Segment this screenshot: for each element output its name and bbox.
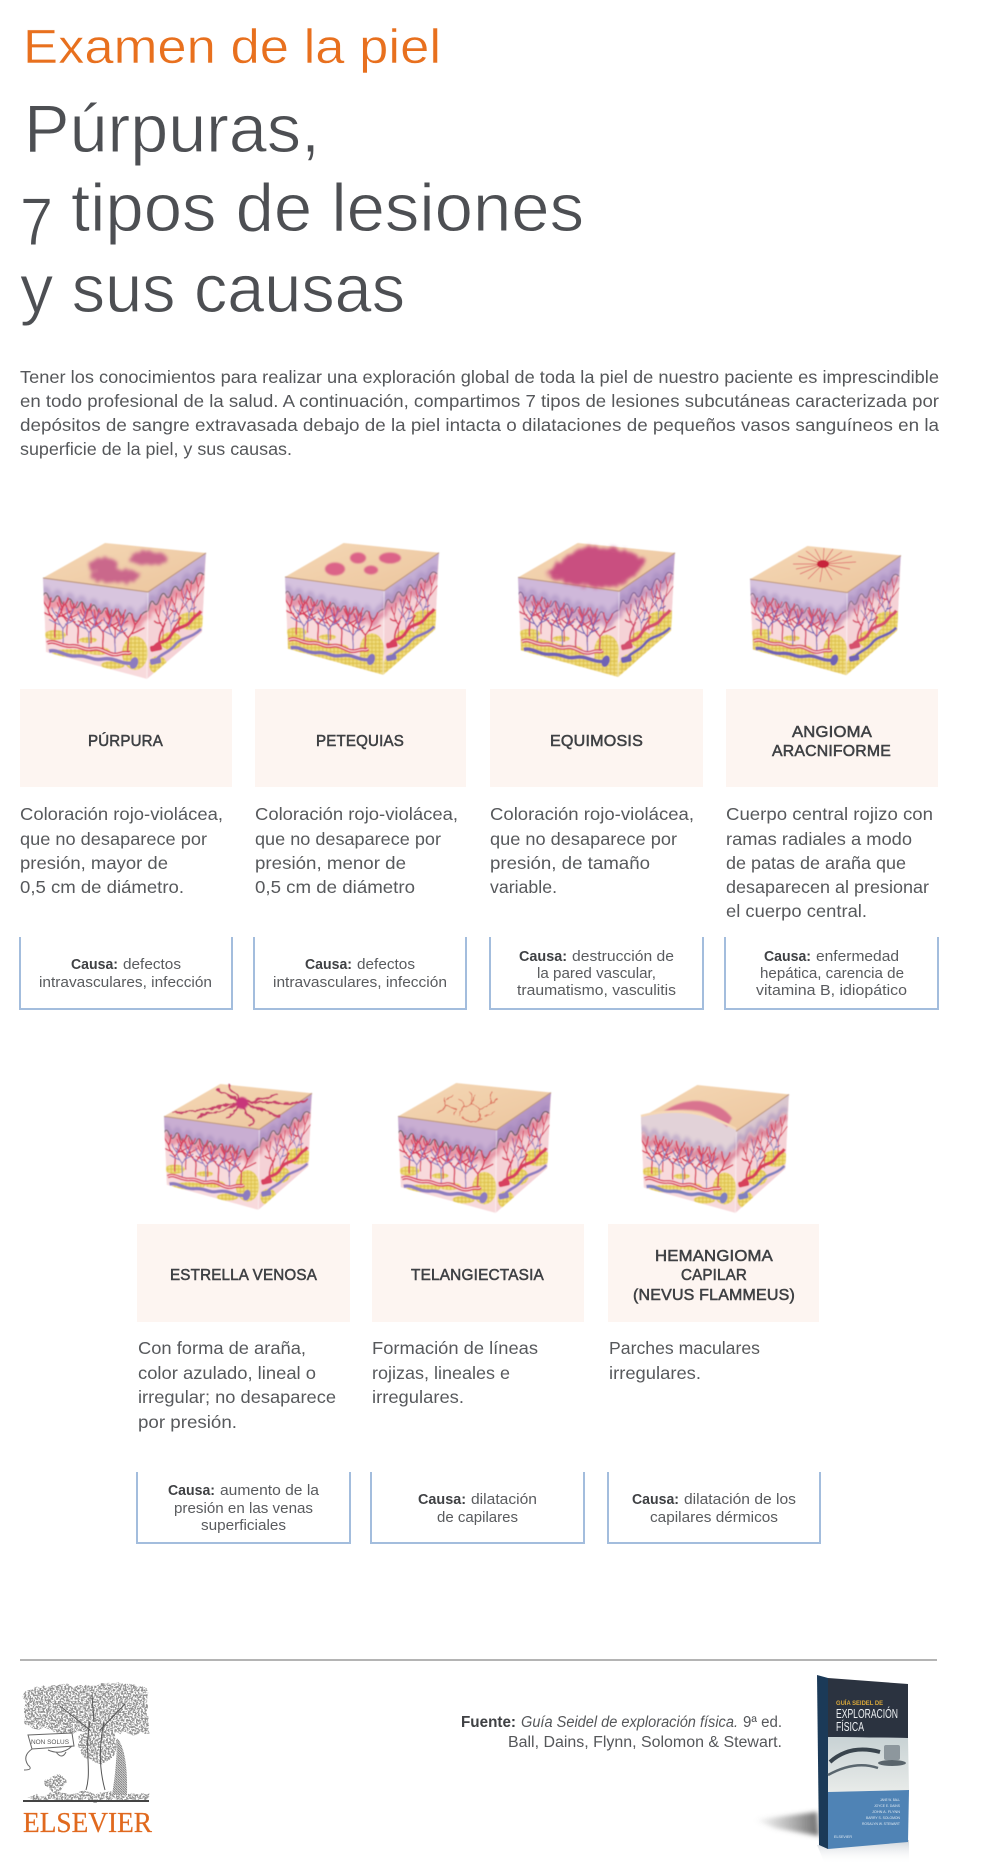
description: petequias [255,804,458,897]
label box: hemangioma capilar: CAPILAR [681,1267,747,1284]
main heading [20,91,584,327]
illustration: telangiectasia skin cube [396,1083,551,1213]
label box: angioma aracniforme [726,689,938,787]
description: petequias: 0,5 cm de diámetro [255,877,415,897]
description: estrella venosa: color azulado, lineal o [138,1363,316,1383]
main heading: tipos de lesiones [71,170,584,246]
illustration: equimosis skin cube [516,543,675,677]
main heading: Púrpuras, [24,91,320,167]
cause box: estrella venosa [137,1472,350,1543]
illustration: petequias skin cube [283,543,439,675]
description: angioma aracniforme: ramas radiales a modo [726,829,912,849]
panel: estrella venosa [137,1084,350,1543]
cause box: estrella venosa: aumento de la [220,1483,320,1499]
book cover: Guía Seidel de exploración física: BARRY S. SOLOMON [866,1815,900,1820]
intro paragraph: en todo profesional de la salud. A continuación, compartimos 7 tipos de lesiones subcutáneas caracterizada por [20,391,939,411]
description: estrella venosa: por presión. [138,1412,237,1432]
label box: telangiectasia [372,1224,584,1322]
intro paragraph: Tener los conocimientos para realizar una exploración global de toda la piel de nuestro paciente es imprescindible [20,367,939,387]
cause box: petequias: intravasculares, infección [273,975,447,991]
logo: Elsevier tree and wordmark: NON SOLUS [31,1740,69,1746]
description: hemangioma capilar [609,1338,760,1383]
cause box: equimosis: Causa: [519,949,567,965]
page title: Examen de la piel: Examen de la piel [23,21,441,74]
label box: telangiectasia: TELANGIECTASIA [411,1267,544,1284]
intro paragraph: superficie de la piel, y sus causas. [20,439,292,459]
label box: hemangioma capilar: HEMANGIOMA [655,1248,773,1265]
source citation: 9ª ed. [743,1714,782,1731]
description: angioma aracniforme: de patas de araña que [726,853,906,873]
book cover: Guía Seidel de exploración física: JOHN A. FLYNN [872,1809,900,1814]
cause box: estrella venosa: presión en las venas [174,1501,313,1517]
description: angioma aracniforme: desaparecen al presionar [726,877,929,897]
panel: telangiectasia [371,1083,584,1543]
panel: angioma aracniforme [725,546,938,1009]
description: telangiectasia: rojizas, lineales e [372,1363,510,1383]
cause box: telangiectasia: dilatación [471,1492,537,1508]
description: hemangioma capilar: irregulares. [609,1363,701,1383]
panel: hemangioma capilar [608,1085,820,1543]
illustration: angioma skin cube [748,546,901,675]
panel: petequias [254,543,466,1009]
label box: angioma aracniforme: ARACNIFORME [772,743,891,760]
description: hemangioma capilar: Parches maculares [609,1338,760,1358]
cause box: equimosis: la pared vascular, [537,966,656,982]
description: equimosis: variable. [490,877,557,897]
illustration: hemangioma skin cube [639,1085,789,1213]
label box: petequias [255,689,466,787]
cause box: púrpura: intravasculares, infección [39,975,212,991]
main heading: y sus causas [20,251,405,327]
label box: púrpura [20,689,232,787]
source citation: Guía Seidel de exploración física. [521,1714,738,1731]
label box: estrella venosa [137,1224,350,1322]
cause box: angioma aracniforme: enfermedad [816,949,899,965]
description: petequias: que no desaparece por [255,829,441,849]
source citation [461,1714,782,1751]
book cover: Guía Seidel de exploración física: JOYCE E. DAINS [874,1803,900,1808]
label box: equimosis: EQUIMOSIS [550,733,643,750]
cause box: hemangioma capilar: capilares dérmicos [650,1510,778,1526]
source citation: Fuente: [461,1714,516,1731]
label box: angioma aracniforme: ANGIOMA [792,724,872,741]
description: petequias: Coloración rojo-violácea, [255,804,458,824]
book cover: Guía Seidel de exploración física: JANE W. BALL [880,1797,901,1802]
description: equimosis: presión, de tamaño [490,853,650,873]
label box: hemangioma capilar: (NEVUS FLAMMEUS) [633,1287,795,1304]
description: telangiectasia: irregulares. [372,1387,464,1407]
cause box: telangiectasia: de capilares [437,1510,518,1526]
description: estrella venosa: irregular; no desaparece [138,1387,336,1407]
description: telangiectasia [372,1338,538,1407]
book cover: Guía Seidel de exploración física: EXPLORACIÓN [836,1706,898,1721]
intro paragraph: depósitos de sangre extravasada debajo de la piel intacta o dilataciones de pequeños vasos sanguíneos en la [20,415,939,435]
cause box: angioma aracniforme: hepática, carencia de [760,966,904,982]
cause box: púrpura [20,937,232,1009]
description: angioma aracniforme: Cuerpo central rojizo con [726,804,933,824]
cause box: estrella venosa: superficiales [201,1518,286,1534]
cause box: petequias: defectos [357,957,415,973]
description: equimosis [490,804,694,897]
cause box: angioma aracniforme: Causa: [764,949,811,965]
cause box: angioma aracniforme: vitamina B, idiopático [756,983,907,999]
label box: estrella venosa: ESTRELLA VENOSA [170,1267,317,1284]
label box: petequias: PETEQUIAS [316,733,404,750]
panel: púrpura [20,543,232,1009]
description: púrpura: 0,5 cm de diámetro. [20,877,184,897]
description: estrella venosa: Con forma de araña, [138,1338,306,1358]
description: púrpura: Coloración rojo-violácea, [20,804,223,824]
cause box: angioma aracniforme [725,937,938,1009]
label box: equimosis [490,689,703,787]
description: angioma aracniforme [726,804,933,921]
description: equimosis: Coloración rojo-violácea, [490,804,694,824]
source citation: Ball, Dains, Flynn, Solomon & Stewart. [508,1734,782,1751]
book cover: Guía Seidel de exploración física: ELSEVIER [834,1834,852,1839]
book cover: Guía Seidel de exploración física: GUÍA SEIDEL DE [836,1698,884,1707]
cause box: telangiectasia [371,1472,584,1543]
description: púrpura: presión, mayor de [20,853,168,873]
cause box: púrpura: defectos [123,957,181,973]
illustration: estrella venosa skin cube [162,1084,312,1210]
cause box: púrpura: Causa: [71,957,118,973]
description: equimosis: que no desaparece por [490,829,677,849]
description: telangiectasia: Formación de líneas [372,1338,538,1358]
logo: Elsevier tree and wordmark [23,1684,153,1839]
description: angioma aracniforme: el cuerpo central. [726,901,867,921]
cause box: equimosis: traumatismo, vasculitis [517,983,676,999]
cause box: hemangioma capilar [608,1472,820,1543]
label box: púrpura: PÚRPURA [88,731,163,750]
cause box: telangiectasia: Causa: [418,1492,466,1508]
intro paragraph [20,367,939,459]
book cover: Guía Seidel de exploración física [754,1675,909,1864]
cause box: equimosis: destrucción de [572,949,674,965]
illustration: púrpura skin cube [41,543,206,679]
book cover: Guía Seidel de exploración física: ROSALYN W. STEWART [862,1821,900,1826]
cause box: hemangioma capilar: dilatación de los [684,1492,796,1508]
cause box: estrella venosa: Causa: [168,1483,215,1499]
cause box: petequias [254,937,466,1009]
description: púrpura [20,804,223,897]
book cover: Guía Seidel de exploración física: FÍSICA [836,1719,864,1734]
description: petequias: presión, menor de [255,853,406,873]
description: púrpura: que no desaparece por [20,829,207,849]
panel: equimosis [490,543,703,1009]
logo: Elsevier tree and wordmark: ELSEVIER [23,1807,153,1839]
description: estrella venosa [138,1338,336,1432]
label box: hemangioma capilar [608,1224,819,1322]
main heading: 7 [20,184,53,260]
cause box: hemangioma capilar: Causa: [632,1492,679,1508]
cause box: petequias: Causa: [305,957,352,973]
cause box: equimosis [490,937,703,1009]
